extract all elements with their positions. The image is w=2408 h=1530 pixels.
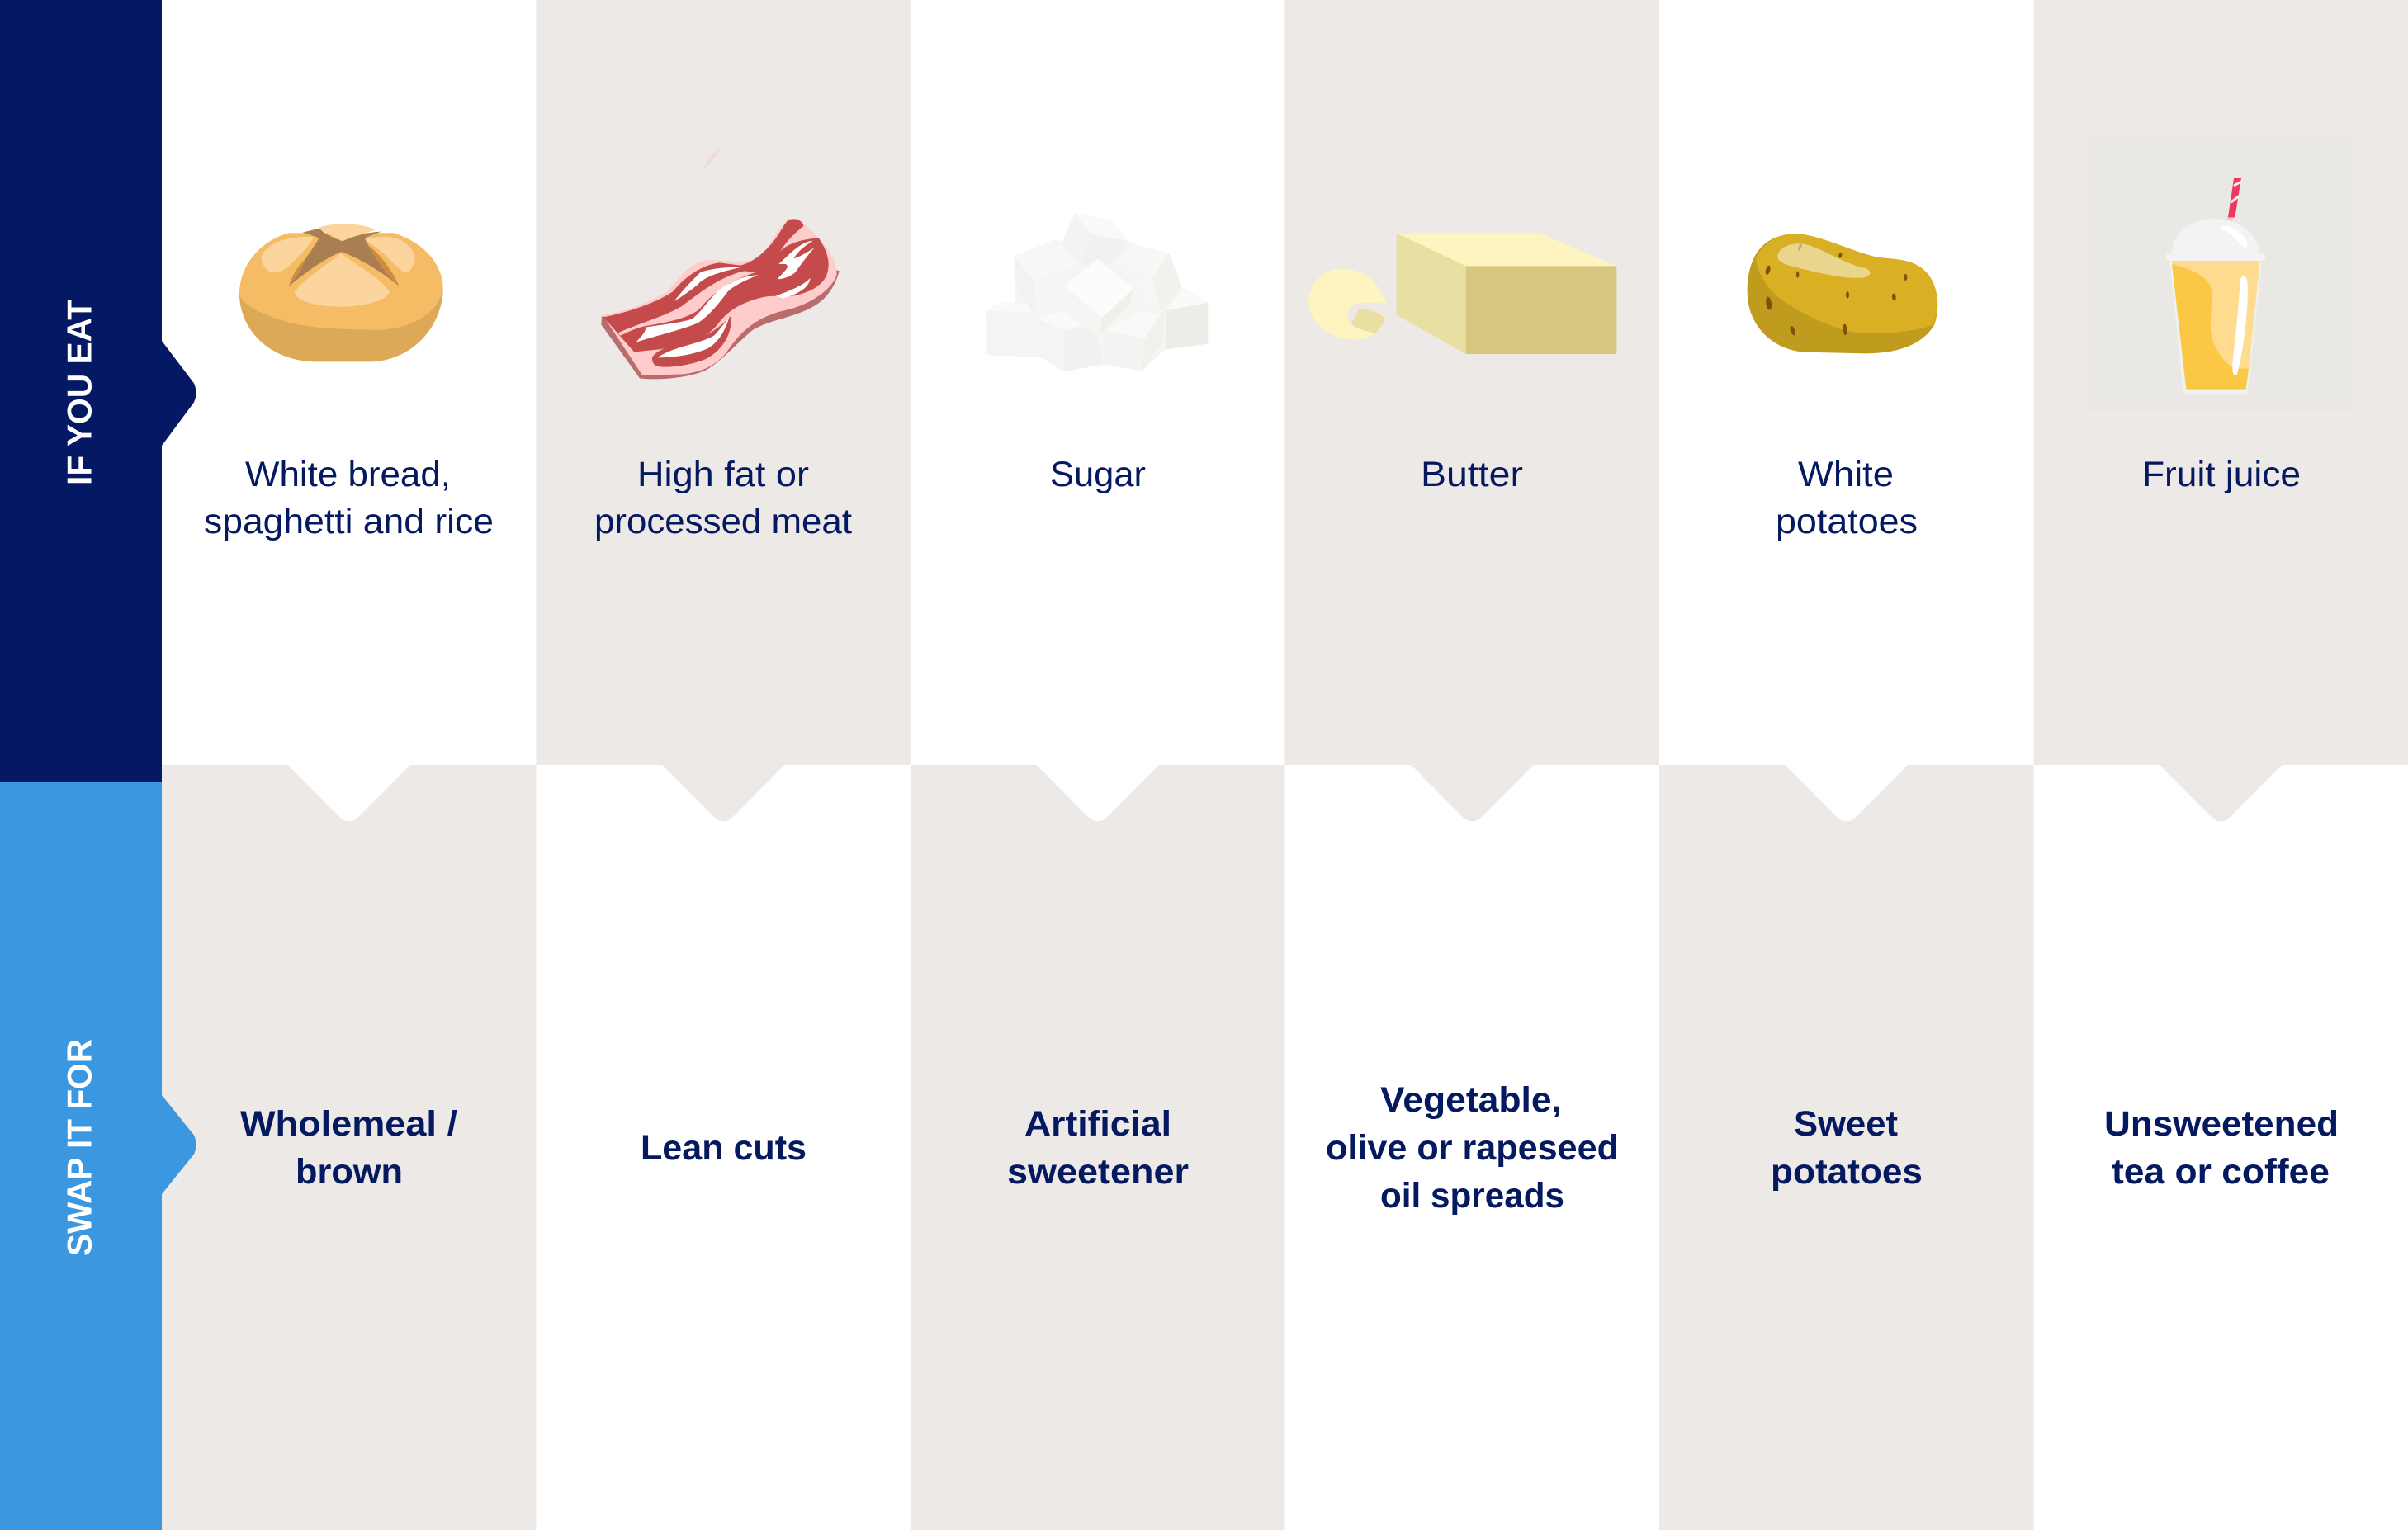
swap: artificial sweetener: Artificial bbox=[1024, 1104, 1171, 1144]
swap: vegetable, olive or rapeseed oil spreads: olive or rapeseed bbox=[1326, 1128, 1619, 1168]
label: white bread, spaghetti and rice: White bread, bbox=[245, 455, 451, 494]
swap: unsweetened tea or coffee: tea or coffee bbox=[2112, 1152, 2330, 1192]
label: high fat or processed meat: processed meat bbox=[594, 502, 852, 541]
panel: top row cells with downward notches bbox=[162, 0, 2408, 822]
label: butter: Butter bbox=[1421, 455, 1523, 494]
swap: vegetable, olive or rapeseed oil spreads bbox=[1326, 1080, 1619, 1216]
sidebar: if you eat: IF YOU EAT bbox=[59, 300, 99, 485]
icon: sugar cubes bbox=[986, 213, 1208, 371]
label: sugar: Sugar bbox=[1050, 455, 1146, 494]
label: white bread, spaghetti and rice: spaghetti and rice bbox=[204, 502, 494, 541]
swap: sweet potatoes: Sweet bbox=[1794, 1104, 1898, 1144]
swap: vegetable, olive or rapeseed oil spreads: Vegetable, bbox=[1380, 1080, 1562, 1120]
sidebar: if you eat bbox=[0, 0, 196, 782]
icon: fruit juice cup bbox=[2166, 178, 2265, 394]
label: white potatoes: potatoes bbox=[1776, 502, 1918, 541]
swap: wholemeal / brown: brown bbox=[296, 1152, 403, 1192]
swap: sweet potatoes: potatoes bbox=[1771, 1152, 1923, 1192]
swap: artificial sweetener: sweetener bbox=[1007, 1152, 1189, 1192]
swap: lean cuts: Lean cuts bbox=[641, 1128, 807, 1168]
icon: butter block and curl bbox=[1308, 234, 1616, 354]
icon: backing tint behind juice bbox=[2087, 134, 2354, 411]
label: high fat or processed meat bbox=[594, 455, 852, 541]
label: white potatoes bbox=[1776, 455, 1918, 541]
swap: vegetable, olive or rapeseed oil spreads: oil spreads bbox=[1380, 1176, 1564, 1216]
icon: bread loaf bbox=[239, 224, 443, 361]
label: white potatoes: White bbox=[1798, 455, 1894, 494]
sidebar: swap it for bbox=[0, 782, 196, 1530]
label: fruit juice: Fruit juice bbox=[2142, 455, 2301, 494]
icon: faint pink sliver above bacon bbox=[703, 146, 721, 170]
icon: bacon rasher bbox=[601, 219, 840, 379]
swap: unsweetened tea or coffee bbox=[2104, 1104, 2339, 1192]
panel: bottom row cell backgrounds bbox=[162, 765, 2034, 1530]
swap: sweet potatoes bbox=[1771, 1104, 1923, 1192]
sidebar: swap it for: SWAP IT FOR bbox=[59, 1039, 99, 1256]
swap: wholemeal / brown: Wholemeal / bbox=[240, 1104, 457, 1144]
swap: wholemeal / brown bbox=[240, 1104, 457, 1192]
swap: artificial sweetener bbox=[1007, 1104, 1189, 1192]
swap: unsweetened tea or coffee: Unsweetened bbox=[2104, 1104, 2339, 1144]
label: white bread, spaghetti and rice bbox=[204, 455, 494, 541]
icon: potato bbox=[1748, 234, 1937, 353]
label: high fat or processed meat: High fat or bbox=[637, 455, 809, 494]
